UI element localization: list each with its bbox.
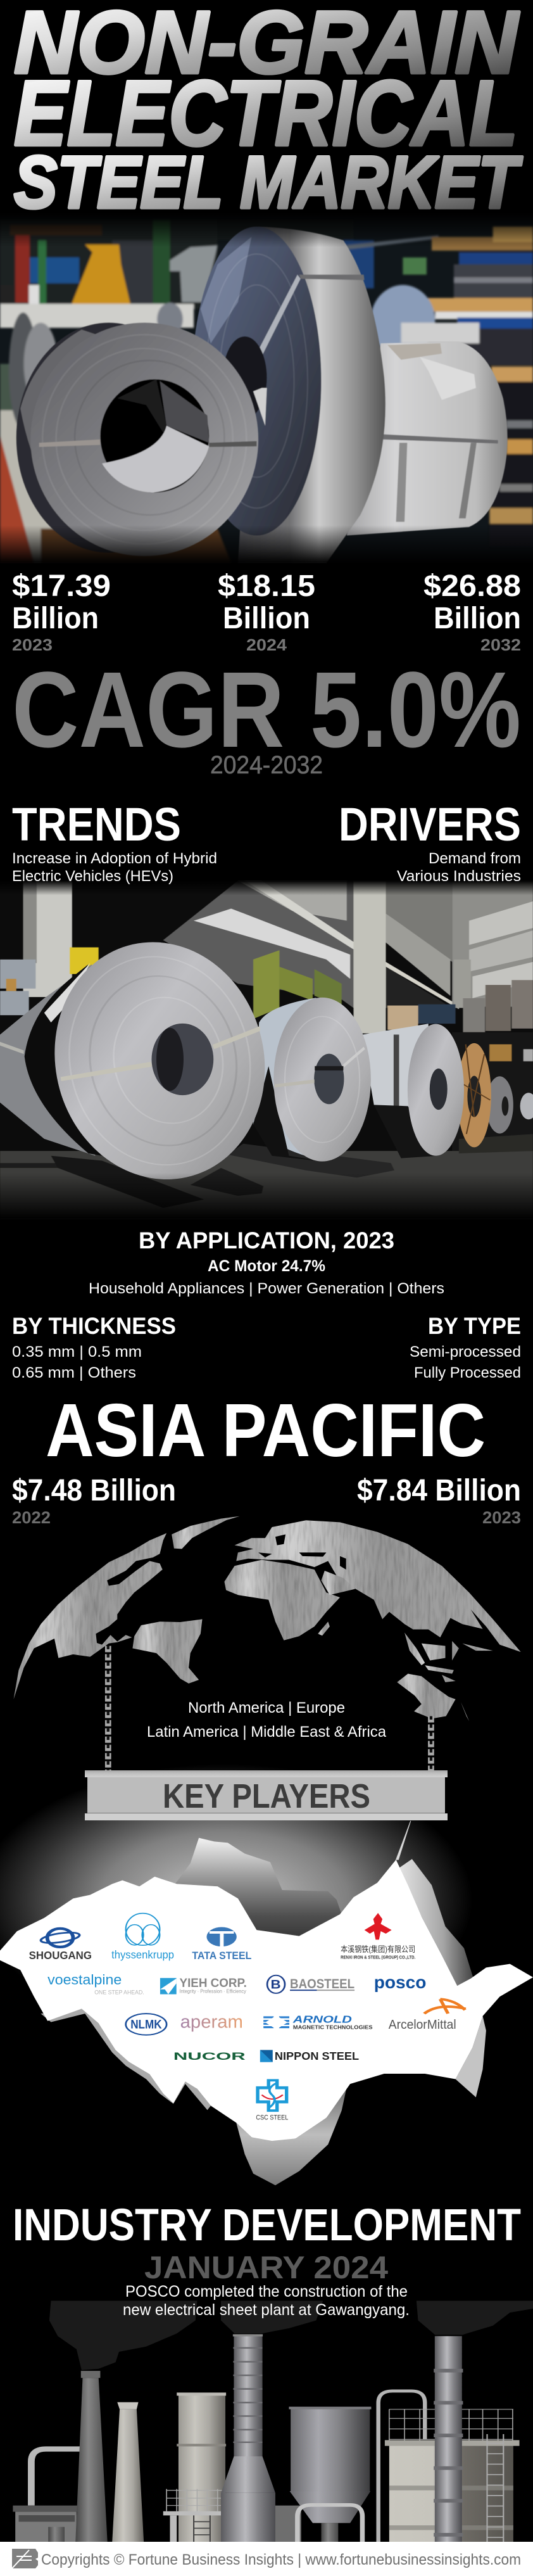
region value 2023 bbox=[357, 1474, 521, 1527]
by type bbox=[410, 1313, 521, 1381]
value 2024: $18.15 bbox=[218, 569, 315, 603]
value 2032: 2032 bbox=[480, 635, 521, 654]
by type: BY TYPE bbox=[428, 1313, 521, 1339]
by application bbox=[89, 1228, 444, 1297]
chimney 2 bbox=[112, 2402, 144, 2542]
market values bbox=[12, 569, 521, 654]
madagascar bbox=[318, 1621, 330, 1635]
steel world map globe bbox=[13, 1516, 521, 1771]
inland seas bbox=[258, 1534, 346, 1570]
other regions: Latin America | Middle East & Africa bbox=[147, 1723, 387, 1741]
stack with cone bbox=[221, 2334, 275, 2542]
value 2024: Billion bbox=[223, 602, 310, 635]
warehouse background bbox=[0, 880, 533, 1224]
torn steel sheet with logos bbox=[0, 1764, 533, 2185]
development description: POSCO completed the construction of the bbox=[125, 2283, 408, 2300]
chimney 1 bbox=[75, 2371, 108, 2542]
logo: yieh corp: YIEH CORP. bbox=[180, 1976, 247, 1989]
southeast asia islands bbox=[404, 1632, 493, 1682]
eurasia bbox=[235, 1520, 521, 1652]
right chain bbox=[425, 1716, 437, 1771]
logo: baosteel bbox=[267, 1976, 354, 1993]
centre coil bbox=[192, 227, 386, 563]
photo: row of coils in warehouse bbox=[0, 880, 533, 1224]
bottom metal flap bbox=[236, 2084, 348, 2185]
logo: csc steel bbox=[256, 2079, 289, 2121]
platform and railing bbox=[163, 2489, 223, 2542]
by application: BY APPLICATION, 2023 bbox=[139, 1228, 394, 1253]
trends: TRENDS bbox=[12, 798, 181, 851]
logo: voestalpine: ONE STEP AHEAD. bbox=[94, 1989, 144, 1996]
africa bbox=[224, 1560, 340, 1640]
by type: Semi-processed bbox=[410, 1343, 521, 1361]
logo: arnold: ARNOLD bbox=[292, 2014, 352, 2025]
lower left flap edge bbox=[41, 2008, 211, 2110]
australia bbox=[397, 1674, 456, 1718]
logo: renxi steel: RENXI IRON & STEEL (GROUP) CO.,LTD. bbox=[341, 1955, 415, 1960]
coil E bbox=[486, 1076, 533, 1134]
key players steel beam sign: KEY PLAYERS bbox=[163, 1777, 370, 1815]
value 2023: 2023 bbox=[12, 635, 53, 654]
value 2024: 2024 bbox=[246, 635, 287, 654]
coil B bbox=[253, 998, 371, 1162]
by thickness: 0.65 mm | Others bbox=[12, 1364, 136, 1381]
footer logo bbox=[12, 2549, 38, 2568]
region heading: ASIA PACIFIC bbox=[46, 1388, 486, 1473]
left chain bbox=[103, 1646, 114, 1771]
trends bbox=[12, 798, 217, 885]
by thickness: 0.35 mm | 0.5 mm bbox=[12, 1343, 142, 1361]
title bbox=[14, 0, 522, 224]
factory illustration bbox=[13, 2301, 533, 2542]
blurred factory background bbox=[0, 220, 533, 563]
region value 2023: 2023 bbox=[482, 1508, 521, 1527]
coil D wooden spool bbox=[457, 1043, 491, 1147]
value 2023: Billion bbox=[12, 602, 99, 635]
silo bbox=[289, 2407, 371, 2542]
region value 2022: $7.48 Billion bbox=[12, 1474, 176, 1507]
drivers: Various Industries bbox=[397, 868, 521, 885]
value 2032: $26.88 bbox=[423, 569, 521, 603]
CAGR: 2024-2032 bbox=[210, 751, 323, 779]
logo: tata steel bbox=[192, 1927, 251, 1962]
logo: thyssenkrupp: thyssenkrupp bbox=[111, 1948, 174, 1961]
right pipe bbox=[379, 2391, 425, 2542]
drivers: Demand from bbox=[429, 850, 521, 867]
top metal flap bbox=[175, 1838, 342, 1936]
arabia bbox=[321, 1571, 355, 1595]
left pipe bbox=[31, 2449, 80, 2506]
front coil bbox=[16, 322, 258, 556]
coil A bbox=[0, 937, 276, 1184]
logo: nucor: NUCOR bbox=[173, 2050, 246, 2062]
new zealand sliver bbox=[461, 1702, 469, 1721]
development description: new electrical sheet plant at Gawangyang. bbox=[123, 2301, 410, 2319]
by application: Household Appliances | Power Generation | Others bbox=[89, 1280, 444, 1297]
value 2032: Billion bbox=[434, 602, 521, 635]
logo: yieh corp: Integrity · Profession · Efficiency bbox=[180, 1989, 246, 1995]
industry development bbox=[13, 2200, 521, 2285]
logo: thyssenkrupp bbox=[111, 1913, 174, 1961]
value 2032 bbox=[423, 569, 521, 654]
logo: nippon steel bbox=[260, 2050, 359, 2062]
right metal flap bbox=[397, 1859, 473, 1986]
value 2023: $17.39 bbox=[12, 569, 111, 603]
right lower flap edge bbox=[456, 2016, 486, 2097]
logo: baosteel: B bbox=[270, 1977, 281, 1991]
glow bbox=[0, 1764, 472, 2036]
logo: posco: posco bbox=[374, 1973, 426, 1993]
value 2024 bbox=[218, 569, 315, 654]
logo: tata steel: TATA STEEL bbox=[192, 1950, 251, 1962]
by thickness bbox=[12, 1313, 176, 1381]
railing on tank bbox=[389, 2409, 513, 2440]
logo: shougang: SHOUGANG bbox=[29, 1949, 92, 1962]
by thickness: BY THICKNESS bbox=[12, 1313, 176, 1339]
region value 2022 bbox=[12, 1474, 176, 1527]
other regions bbox=[147, 1699, 387, 1741]
industry development: JANUARY 2024 bbox=[144, 2250, 388, 2285]
logo: nlmk: NLMK bbox=[130, 2017, 162, 2031]
greenland bbox=[172, 1516, 240, 1549]
region value 2023: $7.84 Billion bbox=[357, 1474, 521, 1507]
ladder bbox=[487, 2434, 503, 2542]
logo: aperam: aperam bbox=[180, 2011, 243, 2032]
logo: voestalpine: voestalpine bbox=[47, 1972, 122, 1988]
white torn sheet bbox=[0, 1860, 533, 2141]
logo: nippon steel: NIPPON STEEL bbox=[275, 2050, 359, 2062]
logo: renxi steel bbox=[341, 1913, 415, 1960]
value 2023 bbox=[12, 569, 111, 654]
south america bbox=[132, 1619, 203, 1684]
coil C bbox=[362, 1024, 464, 1158]
logo: arnold: MAGNETIC TECHNOLOGIES bbox=[293, 2025, 373, 2031]
right white coil bbox=[347, 341, 508, 536]
logo: voestalpine bbox=[47, 1972, 144, 1996]
by type: Fully Processed bbox=[414, 1364, 521, 1381]
development description bbox=[123, 2283, 410, 2319]
key players steel beam sign bbox=[85, 1770, 448, 1820]
logo: baosteel: BAOSTEEL bbox=[290, 1976, 354, 1991]
left building bbox=[13, 2506, 77, 2542]
photo: steel coils in factory bbox=[0, 213, 533, 564]
footer bbox=[0, 2542, 533, 2576]
wire bbox=[396, 1821, 411, 1860]
region value 2022: 2022 bbox=[12, 1508, 51, 1527]
smoke bbox=[49, 2301, 533, 2370]
logo: csc steel: CSC STEEL bbox=[256, 2113, 289, 2121]
drivers bbox=[339, 798, 521, 885]
building behind silo bbox=[274, 2506, 301, 2542]
logo: yieh corp bbox=[160, 1976, 247, 1995]
logo: arnold bbox=[263, 2014, 373, 2031]
logo: renxi steel: 本溪钢铁(集团)有限公司 bbox=[341, 1945, 415, 1954]
tall right stack bbox=[434, 2336, 463, 2542]
logo: nlmk bbox=[126, 2014, 166, 2035]
north america bbox=[13, 1533, 166, 1699]
tower bbox=[177, 2392, 226, 2542]
logo: shougang bbox=[29, 1929, 92, 1962]
other regions: North America | Europe bbox=[188, 1699, 345, 1716]
logo: arcelormittal bbox=[389, 1999, 466, 2032]
storage tank bbox=[385, 2440, 520, 2542]
logo: arcelormittal: ArcelorMittal bbox=[389, 2018, 456, 2032]
trends: Increase in Adoption of Hybrid bbox=[12, 850, 217, 867]
trends: Electric Vehicles (HEVs) bbox=[12, 868, 173, 885]
by application: AC Motor 24.7% bbox=[208, 1257, 325, 1275]
